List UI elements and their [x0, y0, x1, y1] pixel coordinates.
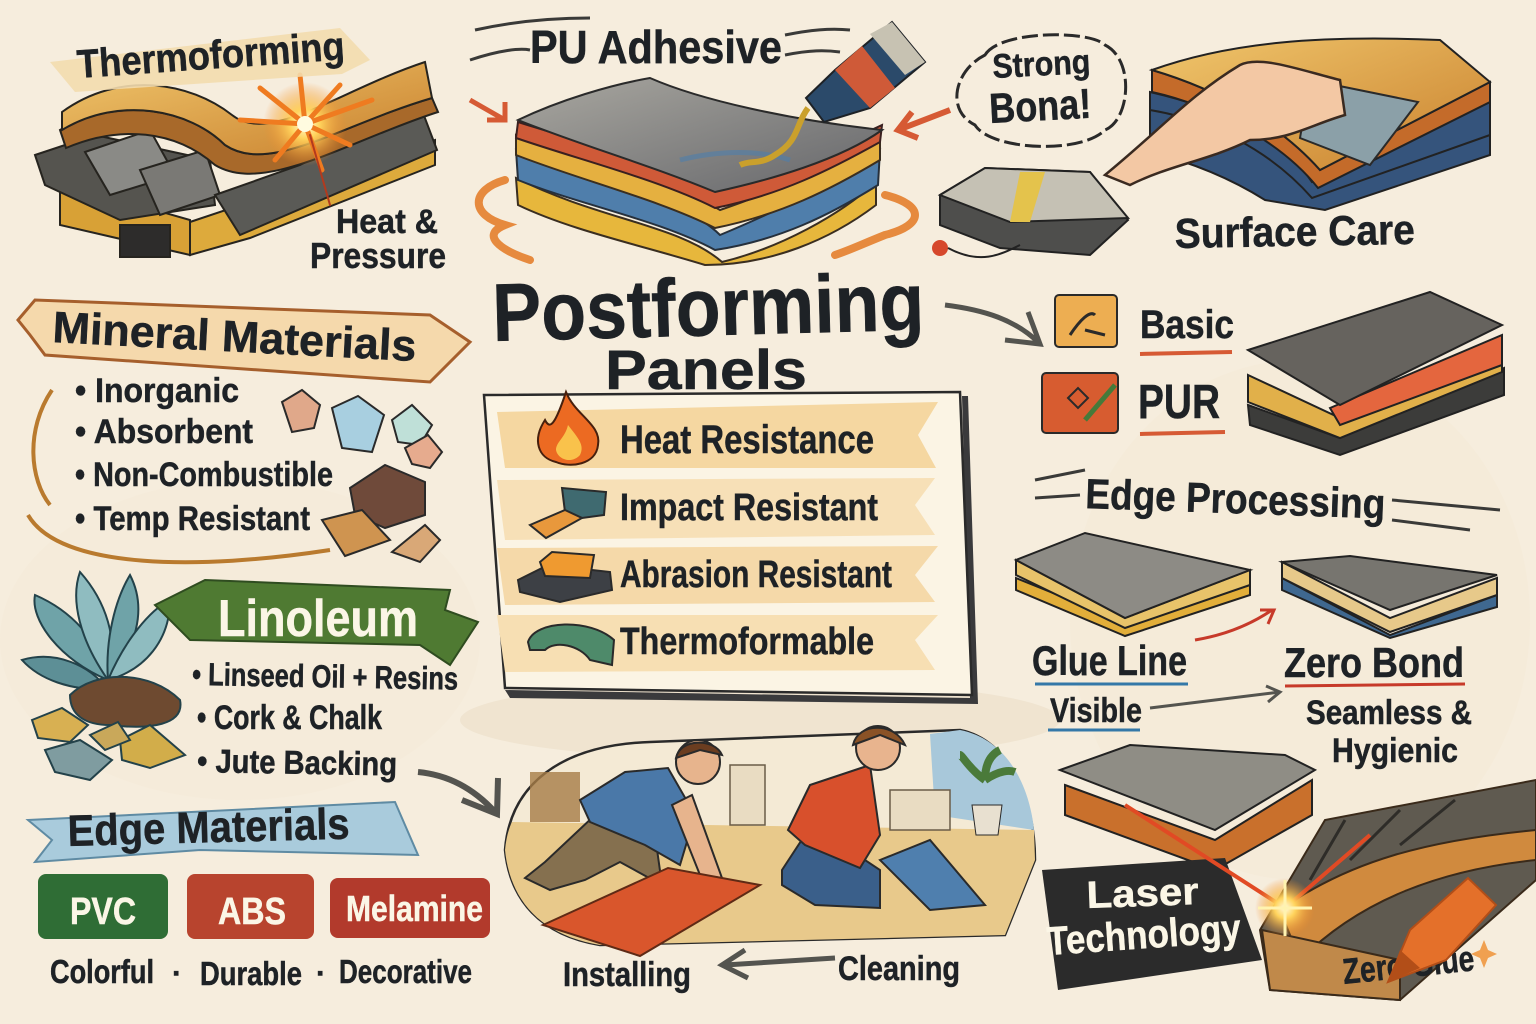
label: Basic: Basic: [1140, 303, 1234, 347]
banner: Thermoforming: Thermoforming: [76, 24, 346, 87]
tag: PVC: [38, 874, 168, 939]
panel: mineral materials: [18, 300, 470, 562]
arrow: to panel right: [898, 110, 950, 138]
panel: PU adhesive: [470, 18, 950, 265]
illustration: layered panel: [516, 78, 882, 265]
illustration: orange mat: [543, 868, 760, 956]
illustration: layered sample: [1248, 292, 1504, 455]
icon: mineral stones: [282, 390, 442, 562]
icon: crayon: [1388, 878, 1497, 982]
banner: Mineral Materials: Mineral Materials: [51, 303, 418, 371]
list: linoleum ingredients: [192, 656, 458, 782]
labels: edge material properties: Durable: [200, 955, 302, 992]
row: Abrasion Resistant: Abrasion Resistant: [620, 554, 892, 596]
banner: Edge Materials: Edge Materials: [67, 800, 350, 856]
heading: Surface Care: Surface Care: [1174, 206, 1415, 257]
heading: PU Adhesive: [470, 18, 850, 73]
callout: strong bona: [957, 35, 1126, 146]
labels: edge material properties: Decorative: [339, 953, 472, 990]
banner: Linoleum: Linoleum: [218, 590, 418, 648]
title: Panels: [605, 338, 807, 401]
panel: surface care: [932, 39, 1490, 257]
label: Glue Line: Glue Line: [1032, 637, 1187, 684]
tag: Melamine: [330, 878, 490, 938]
illustration: small strapped board: [932, 168, 1128, 257]
icon: potted plant: [960, 750, 1015, 835]
callout: strong bona: Strong: [991, 43, 1091, 86]
label: Zero Bond: Zero Bond: [1284, 639, 1464, 686]
tag: ABS: [187, 874, 314, 939]
label: Seamless & Hygienic: [1306, 694, 1472, 770]
arrow: to installing: [418, 772, 498, 814]
row: Heat Resistance: [497, 392, 938, 468]
label: Heat & Pressure: [310, 203, 446, 276]
heading: Edge Processing: Edge Processing: [1085, 470, 1386, 527]
arrow: to basic: [945, 305, 1040, 344]
panel: edge processing: [1016, 470, 1500, 770]
illustration: glue line board: [1016, 533, 1250, 636]
icon: laser beam and spark: [1125, 805, 1370, 938]
icon: hand with cloth: [1105, 62, 1418, 185]
label: Heat & Pressure: Heat &: [336, 203, 438, 241]
illustration: angled board: [1060, 745, 1315, 870]
label: PUR: PUR: [1138, 376, 1220, 429]
arrow: to panel left: [470, 100, 505, 120]
illustration: cut panel: [1260, 780, 1536, 1000]
callout: strong bona: Bona!: [988, 80, 1092, 132]
tag: ABS: ABS: [218, 891, 286, 933]
labels: edge material properties: [50, 953, 472, 992]
board shadow: [505, 396, 978, 704]
label: Cleaning: Cleaning: [838, 950, 960, 988]
arrow: visible to seamless: [1150, 686, 1280, 708]
list: linoleum ingredients: • Linseed Oil + Resins: [192, 656, 458, 697]
panel: thermoforming: [35, 24, 446, 276]
icon: plant and stones: [22, 572, 185, 780]
decorative swirls: [479, 180, 915, 260]
banner: Mineral Materials: [18, 300, 470, 382]
panel: Laser Technology chalkboard: Technology: [1046, 907, 1243, 964]
illustration: zero bond board: [1282, 556, 1497, 638]
panel: edge materials: [28, 800, 490, 992]
label: Heat & Pressure: Pressure: [310, 235, 446, 276]
panel: basic and PUR: [945, 292, 1504, 455]
label: Seamless & Hygienic: Seamless &: [1306, 694, 1472, 732]
row: Impact Resistant: [497, 478, 935, 540]
illustration: kneeling man: [525, 740, 722, 890]
row: Thermoformable: [497, 615, 938, 672]
icon: flame: [538, 392, 598, 465]
title: [491, 257, 925, 401]
icon: basic: [1055, 295, 1117, 347]
panel: linoleum: [22, 572, 498, 814]
tag: Melamine: Melamine: [346, 888, 483, 929]
row: Thermoformable: Thermoformable: [620, 621, 874, 663]
label: Installing: Installing: [563, 956, 691, 994]
row: Impact Resistant: Impact Resistant: [620, 487, 878, 529]
arrow: glue line to zero bond: [1195, 610, 1274, 640]
illustration: panel over mould: [35, 62, 438, 257]
decorative bracket: [28, 390, 330, 562]
panel: installing and cleaning: [505, 726, 1035, 994]
row: Abrasion Resistant: [497, 546, 938, 605]
icon: bent profile: [528, 624, 614, 665]
label: Seamless & Hygienic: Hygienic: [1332, 732, 1458, 770]
list: mineral properties: • Inorganic: [75, 372, 239, 410]
illustration: curved board: [1150, 39, 1490, 210]
icon: heat burst: [240, 75, 372, 205]
title: Postforming: [491, 257, 925, 359]
list: mineral properties: • Temp Resistant: [75, 500, 310, 538]
list: linoleum ingredients: • Cork & Chalk: [197, 699, 382, 737]
panel: laser technology: [1042, 745, 1536, 1000]
icon: PUR: [1042, 373, 1118, 433]
list: linoleum ingredients: • Jute Backing: [197, 742, 397, 782]
icon: glue bottle: [740, 22, 925, 165]
illustration: kneeling woman: [782, 726, 985, 910]
panel: Laser Technology chalkboard: [1042, 858, 1262, 990]
list: mineral properties: [75, 372, 333, 538]
panel: central benefits board: [484, 392, 978, 704]
icon: block: [518, 552, 612, 602]
board: [484, 392, 972, 695]
labels: edge material properties: ·: [316, 957, 326, 990]
scene background: [505, 730, 1035, 945]
heading: PU Adhesive: PU Adhesive: [530, 21, 782, 73]
labels: edge material properties: Colorful: [50, 953, 154, 990]
row: Heat Resistance: Heat Resistance: [620, 418, 874, 462]
tag: PVC: PVC: [70, 891, 136, 933]
list: mineral properties: • Absorbent: [75, 413, 253, 451]
icon: hammer: [530, 488, 606, 538]
list: mineral properties: • Non-Combustible: [75, 456, 333, 494]
label: Zero Glue: Zero Glue: [1341, 937, 1476, 992]
label: Visible: Visible: [1050, 692, 1142, 730]
labels: edge material properties: ·: [172, 957, 182, 990]
arrow: cleaning to installing: [722, 950, 835, 978]
banner: Linoleum: [155, 580, 478, 665]
panel: Laser Technology chalkboard: Laser: [1086, 871, 1199, 917]
